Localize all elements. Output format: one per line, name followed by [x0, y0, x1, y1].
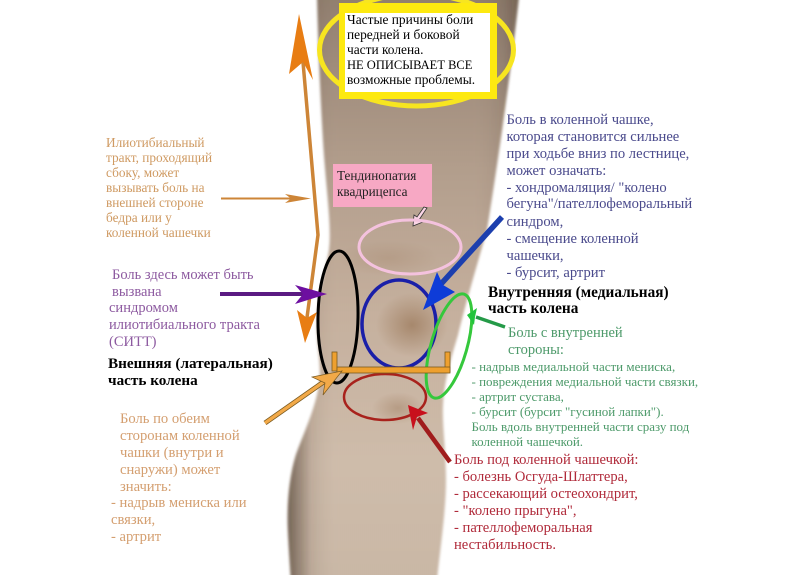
blue arrow — [423, 217, 502, 310]
blue text: бегуна"/пателлофеморальный — [506, 196, 692, 212]
iliotibial text: коленной чашечки — [106, 225, 211, 240]
blue text — [506, 112, 692, 281]
purple text: илиотибиального тракта — [109, 317, 260, 333]
blue text: Боль в коленной чашке, — [506, 112, 654, 128]
green text: - повреждения медиальной части связки, — [472, 374, 698, 389]
yellow callout: Частые причины боли — [347, 12, 473, 27]
purple arrow — [220, 285, 327, 304]
blue text: чашечки, — [506, 248, 564, 264]
red text: - пателлофеморальная — [454, 520, 593, 536]
orange text: значить: — [120, 479, 172, 495]
iliotibial text: сбоку, может — [106, 165, 179, 180]
purple text: синдромом — [109, 300, 178, 316]
green text: - артрит сустава, — [472, 389, 564, 404]
lateral heading: Внешняя (латеральная) — [108, 355, 273, 372]
blue text: - хондромаляция/ "колено — [506, 180, 667, 196]
red arrow — [408, 405, 450, 462]
green text: Боль с внутренней — [508, 325, 623, 341]
red text: Боль под коленной чашечкой: — [454, 452, 638, 468]
arrow: iliotibial pointer — [221, 194, 311, 203]
red text — [454, 452, 638, 553]
orange text: связки, — [111, 512, 155, 528]
red text: - рассекающий остеохондрит, — [454, 486, 638, 502]
ellipse: quadriceps tendon — [359, 220, 461, 274]
quadriceps label: Тендинопатия — [337, 168, 416, 183]
yellow callout: передней и боковой — [347, 27, 460, 42]
green text: - бурсит (бурсит "гусиной лапки"). — [472, 404, 664, 419]
purple text: вызвана — [112, 284, 162, 300]
lateral heading — [108, 355, 273, 389]
ellipse: outer knee — [317, 251, 359, 383]
green arrow — [467, 308, 505, 327]
red text: - болезнь Осгуда-Шлаттера, — [454, 469, 628, 485]
green text: Боль вдоль внутренней части сразу под — [472, 419, 690, 434]
medial heading: часть колена — [488, 300, 579, 317]
orange text: Боль по обеим — [120, 411, 210, 427]
red text: - "колено прыгуна", — [454, 503, 577, 519]
ellipse: below kneecap — [344, 374, 426, 420]
orange text: - артрит — [111, 529, 162, 545]
leg — [288, 0, 519, 575]
medial heading: Внутренняя (медиальная) — [488, 284, 669, 301]
yellow callout — [320, 0, 514, 106]
blue text: синдром, — [506, 214, 563, 230]
ellipse: inner knee — [417, 289, 481, 403]
iliotibial text: тракт, проходящий — [106, 150, 212, 165]
orange text: - надрыв мениска или — [111, 495, 247, 511]
iliotibial text: вызывать боль на — [106, 180, 205, 195]
iliotibial band arrow — [289, 14, 318, 343]
green text — [472, 325, 698, 449]
iliotibial text: внешней стороне — [106, 195, 204, 210]
orange text: сторонам коленной — [120, 428, 240, 444]
orange text: чашки (внутри и — [120, 445, 224, 461]
green text: коленной чашечкой. — [472, 434, 583, 449]
blue text: которая становится сильнее — [506, 129, 679, 145]
purple text: Боль здесь может быть — [112, 267, 254, 283]
blue text: может означать: — [506, 163, 606, 179]
quadriceps label — [333, 164, 432, 207]
blue text: - смещение коленной — [506, 231, 639, 247]
purple text — [109, 267, 260, 350]
quadriceps label: квадрицепса — [337, 184, 408, 199]
orange arrow — [265, 371, 342, 423]
quadriceps arrow — [413, 207, 427, 226]
yellow callout: части колена. — [347, 42, 423, 57]
blue text: - бурсит, артрит — [506, 265, 606, 281]
orange text — [111, 411, 247, 545]
orange text: снаружи) может — [120, 462, 221, 478]
yellow callout: НЕ ОПИСЫВАЕТ ВСЕ — [347, 58, 473, 72]
lateral heading: часть колена — [108, 372, 198, 389]
ellipse: kneecap — [362, 280, 436, 368]
iliotibial text — [106, 135, 212, 240]
blue text: при ходьбе вниз по лестнице, — [506, 146, 689, 162]
green text: стороны: — [508, 342, 564, 358]
bracket — [332, 352, 450, 373]
green text: - надрыв медиальной части мениска, — [472, 359, 675, 374]
purple text: (СИТТ) — [109, 334, 157, 350]
yellow callout: возможные проблемы. — [347, 72, 475, 87]
red text: нестабильность. — [454, 537, 556, 553]
iliotibial text: бедра или у — [106, 210, 172, 225]
medial heading — [488, 284, 669, 317]
iliotibial text: Илиотибиальный — [106, 135, 205, 150]
